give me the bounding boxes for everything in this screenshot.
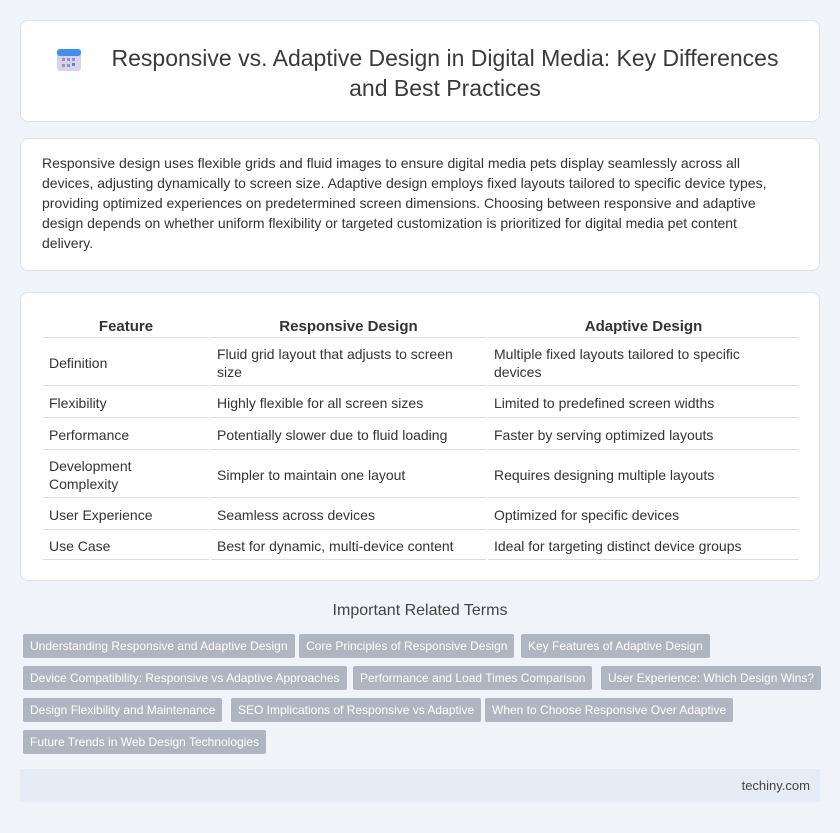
- related terms tags: Understanding Responsive and Adaptive Design: [30, 639, 288, 653]
- comparison table card: Flexibility: [49, 394, 107, 410]
- related terms tags: Core Principles of Responsive Design: [306, 639, 507, 653]
- footer: [20, 769, 820, 802]
- comparison table card: Performance: [49, 426, 129, 442]
- comparison table card: Best for dynamic, multi-device content: [217, 538, 454, 554]
- title: Responsive vs. Adaptive Design in Digital Media: Key Differences and Best Practices: [112, 45, 778, 101]
- comparison table card: Adaptive Design: [585, 318, 702, 335]
- related terms tags: Design Flexibility and Maintenance: [30, 703, 215, 717]
- related terms tags: User Experience: Which Design Wins?: [608, 671, 814, 685]
- related terms tags: Device Compatibility: Responsive vs Adaptive Approaches: [30, 671, 340, 685]
- description card: Responsive design uses flexible grids and fluid images to ensure digital media pets display seamlessly across all devices, adjusting dynamically to screen size. Adaptive design employs fixed layouts tailored to specific device types, providing optimized experiences on predetermined screen dimensions. Choosing between responsive and adaptive design depends on whether uniform flexibility or targeted customization is prioritized for digital media pet content delivery.: [42, 155, 766, 251]
- related terms heading: Important Related Terms: [333, 602, 507, 619]
- comparison table card: Responsive Design: [279, 318, 418, 335]
- related terms tags: Key Features of Adaptive Design: [528, 639, 703, 653]
- comparison table card: Seamless across devices: [217, 506, 375, 522]
- comparison table card: Development Complexity: [49, 458, 132, 492]
- comparison table card: Multiple fixed layouts tailored to specific devices: [494, 346, 740, 380]
- comparison table card: Ideal for targeting distinct device groups: [494, 538, 741, 554]
- comparison table card: Definition: [49, 354, 107, 370]
- related terms tags: Future Trends in Web Design Technologies: [30, 735, 259, 749]
- comparison table card: Limited to predefined screen widths: [494, 394, 714, 410]
- related terms tags: SEO Implications of Responsive vs Adaptive: [238, 703, 474, 717]
- related terms tags: [23, 634, 821, 754]
- header card: [20, 20, 820, 122]
- comparison table card: Fluid grid layout that adjusts to screen size: [217, 346, 453, 380]
- related terms tags: When to Choose Responsive Over Adaptive: [492, 703, 726, 717]
- comparison table card: Use Case: [49, 538, 110, 554]
- icon: calendar: [57, 49, 81, 71]
- related terms tags: Performance and Load Times Comparison: [360, 671, 585, 685]
- comparison table card: Highly flexible for all screen sizes: [217, 394, 423, 410]
- comparison table card: [20, 292, 820, 581]
- comparison table card: Feature: [99, 318, 153, 335]
- footer: techiny.com: [742, 778, 810, 793]
- comparison table card: Potentially slower due to fluid loading: [217, 426, 447, 442]
- comparison table card: User Experience: [49, 506, 152, 522]
- comparison table card: Requires designing multiple layouts: [494, 466, 714, 482]
- comparison table card: Simpler to maintain one layout: [217, 466, 405, 482]
- comparison table card: Faster by serving optimized layouts: [494, 426, 713, 442]
- description card: [20, 138, 820, 271]
- comparison table card: Optimized for specific devices: [494, 506, 679, 522]
